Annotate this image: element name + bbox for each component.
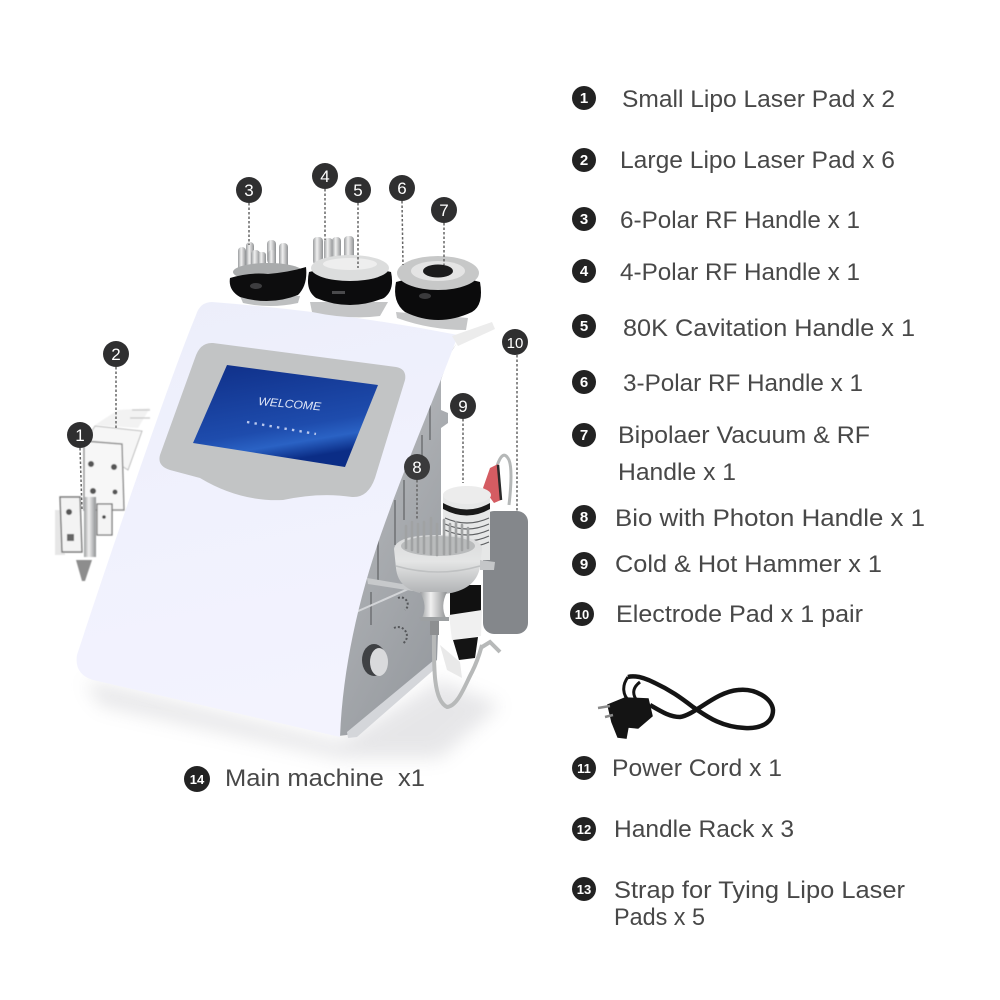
cold and hot hammer — [443, 486, 491, 560]
callout badges on machine: 7 — [439, 201, 449, 220]
machine side panel — [338, 343, 457, 736]
item 5: 80K Cavitation Handle x 1 — [623, 315, 915, 342]
item 7: Handle x 1 — [618, 459, 736, 486]
item 10: Electrode Pad x 1 pair — [616, 601, 863, 628]
floor shadow — [85, 680, 500, 758]
base strip — [347, 660, 436, 738]
item 10: 10 — [575, 607, 589, 622]
hammer handle — [440, 585, 482, 678]
item 13: Pads x 5 — [614, 904, 705, 931]
item 8: Bio with Photon Handle x 1 — [615, 505, 925, 532]
side handle rack — [367, 578, 414, 591]
electrode cable and red clip — [483, 455, 511, 505]
pointers — [80, 189, 517, 520]
item 6: 6 — [580, 374, 588, 391]
callout badges on machine: 8 — [412, 458, 422, 477]
item 13: 13 — [577, 882, 591, 897]
item 7: 7 — [580, 427, 588, 444]
screen — [193, 365, 378, 467]
label: main machine: 14 — [190, 772, 205, 787]
icon: power cord — [598, 676, 773, 738]
small lipo laser pads — [55, 497, 112, 581]
top handle rack arm — [452, 322, 495, 346]
panel divider — [356, 586, 415, 612]
callout badges on machine: 1 — [75, 426, 85, 445]
item 3: 3 — [580, 211, 588, 228]
item 1: Small Lipo Laser Pad x 2 — [622, 86, 895, 113]
bio photon handle — [394, 518, 482, 635]
item 2: 2 — [580, 152, 588, 169]
callout badges on machine: 10 — [507, 335, 523, 352]
callout badges on machine: 3 — [244, 181, 254, 200]
item 12: 12 — [577, 822, 591, 837]
callout badges on machine — [67, 163, 528, 480]
hammer rack clip — [480, 560, 495, 570]
callout badges on machine: 2 — [111, 345, 121, 364]
electrode pad — [483, 511, 528, 634]
large lipo laser pads — [84, 408, 150, 510]
item 12: Handle Rack x 3 — [614, 816, 794, 843]
item 1: 1 — [580, 90, 588, 107]
item 13 — [572, 877, 905, 931]
screen bezel — [159, 343, 405, 500]
progress dots — [247, 422, 316, 434]
handle 4: 4-polar RF — [313, 236, 354, 265]
item 3: 6-Polar RF Handle x 1 — [620, 207, 860, 234]
item 9: 9 — [580, 556, 588, 573]
handle 3: 6-polar RF — [230, 240, 306, 306]
power socket and knob — [362, 597, 408, 676]
item 2: Large Lipo Laser Pad x 6 — [620, 147, 895, 174]
item 8: 8 — [580, 509, 588, 526]
handle 5: 80K cavitation — [308, 255, 392, 317]
item 6: 3-Polar RF Handle x 1 — [623, 370, 863, 397]
item 5: 5 — [580, 318, 588, 335]
handle cable — [434, 625, 500, 707]
callout badges on machine: 4 — [320, 167, 330, 186]
side panel slots — [371, 405, 430, 625]
item 11: Power Cord x 1 — [612, 755, 782, 782]
machine white body — [77, 302, 458, 737]
welcome text: WELCOME — [258, 396, 322, 414]
item 9: Cold & Hot Hammer x 1 — [615, 551, 882, 578]
item 4: 4 — [580, 263, 589, 280]
item 11: 11 — [577, 761, 591, 776]
callout badges on machine: 5 — [353, 181, 363, 200]
parts list — [570, 86, 925, 931]
item 13: Strap for Tying Lipo Laser — [614, 877, 905, 904]
main machine illustration — [55, 236, 528, 758]
callout badges on machine: 6 — [397, 179, 407, 198]
item 4: 4-Polar RF Handle x 1 — [620, 259, 860, 286]
callout badges on machine: 9 — [458, 397, 468, 416]
label: main machine: Main machine x1 — [225, 765, 425, 792]
item 7: Bipolaer Vacuum & RF — [618, 422, 870, 449]
item 7 — [572, 422, 870, 486]
handle 7: bipolar vacuum RF — [395, 256, 481, 330]
